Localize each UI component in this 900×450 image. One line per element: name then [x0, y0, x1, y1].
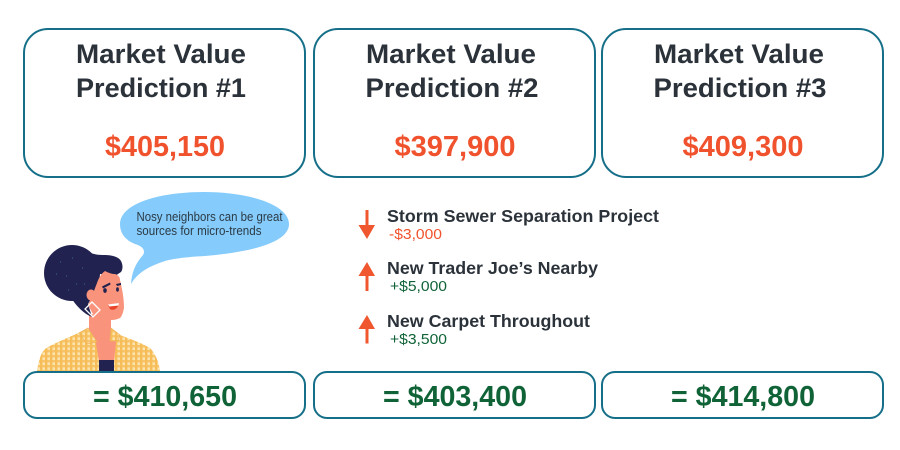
total 2 value: = $403,400 — [383, 381, 527, 413]
adjustment: trader joe's — [358, 258, 598, 295]
amount: trader joe's: +$5,000 — [390, 279, 447, 295]
subheading: prediction 2: Prediction #2 — [366, 73, 538, 103]
label: carpet: New Carpet Throughout — [387, 311, 590, 331]
hair — [44, 245, 122, 317]
illustration: woman — [37, 245, 160, 371]
heading: prediction 3: Market Value — [654, 39, 824, 69]
shirt — [37, 328, 160, 371]
mouth — [108, 303, 119, 310]
eyebrow — [102, 282, 121, 288]
label: storm sewer: Storm Sewer Separation Project — [387, 206, 659, 226]
value: prediction 3: $409,300 — [682, 131, 804, 163]
adjustment: storm sewer — [358, 206, 659, 243]
panel: prediction 1 — [24, 29, 305, 177]
neck and chest — [89, 314, 116, 361]
panel: prediction 2 — [314, 29, 595, 177]
speech bubble — [120, 192, 289, 284]
total 1 value: = $410,650 — [93, 381, 237, 413]
total 3 value: = $414,800 — [671, 381, 815, 413]
collar — [79, 328, 120, 344]
earring — [85, 302, 100, 317]
total 1 — [24, 372, 305, 418]
icon: up arrow — [358, 262, 375, 291]
heading: prediction 1: Market Value — [76, 39, 246, 69]
total 3 — [602, 372, 883, 418]
value: prediction 1: $405,150 — [105, 131, 225, 163]
hair highlights — [56, 258, 85, 290]
subheading: prediction 1: Prediction #1 — [76, 73, 246, 103]
ear — [86, 290, 96, 300]
label: trader joe's: New Trader Joe’s Nearby — [387, 258, 598, 278]
amount: storm sewer: -$3,000 — [389, 227, 442, 243]
value: prediction 2: $397,900 — [394, 131, 516, 163]
face — [88, 271, 124, 320]
icon: down arrow — [358, 210, 375, 239]
bubble text: Nosy neighbors can be great — [136, 210, 283, 224]
subheading: prediction 3: Prediction #3 — [654, 73, 826, 103]
icon: up arrow — [358, 315, 375, 344]
eye — [103, 288, 107, 293]
top — [99, 360, 114, 371]
panel: prediction 3 — [602, 29, 883, 177]
total 2 — [314, 372, 595, 418]
amount: carpet: +$3,500 — [390, 332, 447, 348]
adjustment: carpet — [358, 311, 590, 348]
bubble text: sources for micro-trends — [136, 224, 262, 238]
heading: prediction 2: Market Value — [366, 39, 536, 69]
